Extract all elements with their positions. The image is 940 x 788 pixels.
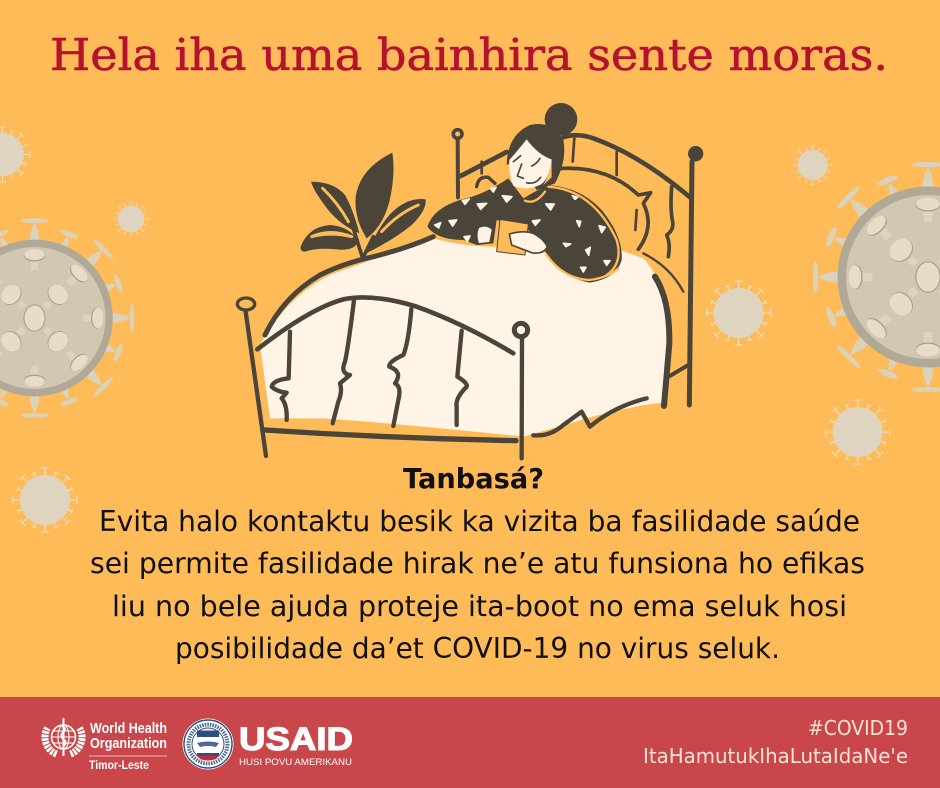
pillow [558,168,683,292]
virus: small mid right [707,281,771,345]
logo: World Health Organization Timor-Leste [45,718,167,772]
blanket [260,238,667,437]
footer band [0,697,940,788]
virus: small left [114,202,148,236]
plant [301,153,426,258]
virus: small top right [793,146,832,184]
bun and hair [507,103,577,190]
elbow loop behind the shoulder [477,177,495,187]
body text [90,505,865,665]
bed frame: foot bars [272,300,467,426]
title: Hela iha uma bainhira sente moras. [50,30,888,81]
virus: small lower left [13,468,77,532]
body text: Evita halo kontaktu besik ka vizita ba fasilidade saúde [99,505,860,538]
virus: large left [0,216,136,420]
body text: liu no bele ajuda proteje ita-boot no ema seluk hosi [112,590,847,623]
logo: USAID: USAID [239,721,353,757]
logo: World Health Organization Timor-Leste: Timor-Leste [89,760,149,772]
logo: World Health Organization Timor-Leste: Organization [90,735,167,752]
WHO emblem [45,718,82,756]
pyjama hearts [435,187,610,272]
virus: large right [810,159,940,395]
book [497,219,528,255]
hashtags: ItaHamutukIhaLutaIdaNe'e [643,744,908,768]
headboard and back posts [453,130,703,405]
bed frame: foot end [237,297,528,458]
illustration: woman resting in bed [237,103,703,458]
USAID seal [182,718,234,770]
body text: sei permite fasilidade hirak ne’e atu funsiona ho efikas [90,547,865,580]
virus: small top left [0,127,30,182]
hands [477,226,547,253]
logo: USAID [182,718,353,770]
virus: small lower right [826,400,890,464]
sleeve orange trim [525,187,619,280]
face [509,139,552,188]
hashtags: #COVID19 [808,716,908,740]
logo: USAID: HUSI POVU AMERIKANU [239,757,352,768]
blanket outline and folds [265,237,669,435]
facial features [513,156,552,185]
woman body in patterned pyjamas [427,178,622,283]
hashtags [643,716,908,768]
logo: World Health Organization Timor-Leste: World Health [90,720,167,737]
heading: Tanbasá?: Tanbasá? [403,462,544,495]
body text: posibilidade da’et COVID-19 no virus seluk. [175,632,780,665]
